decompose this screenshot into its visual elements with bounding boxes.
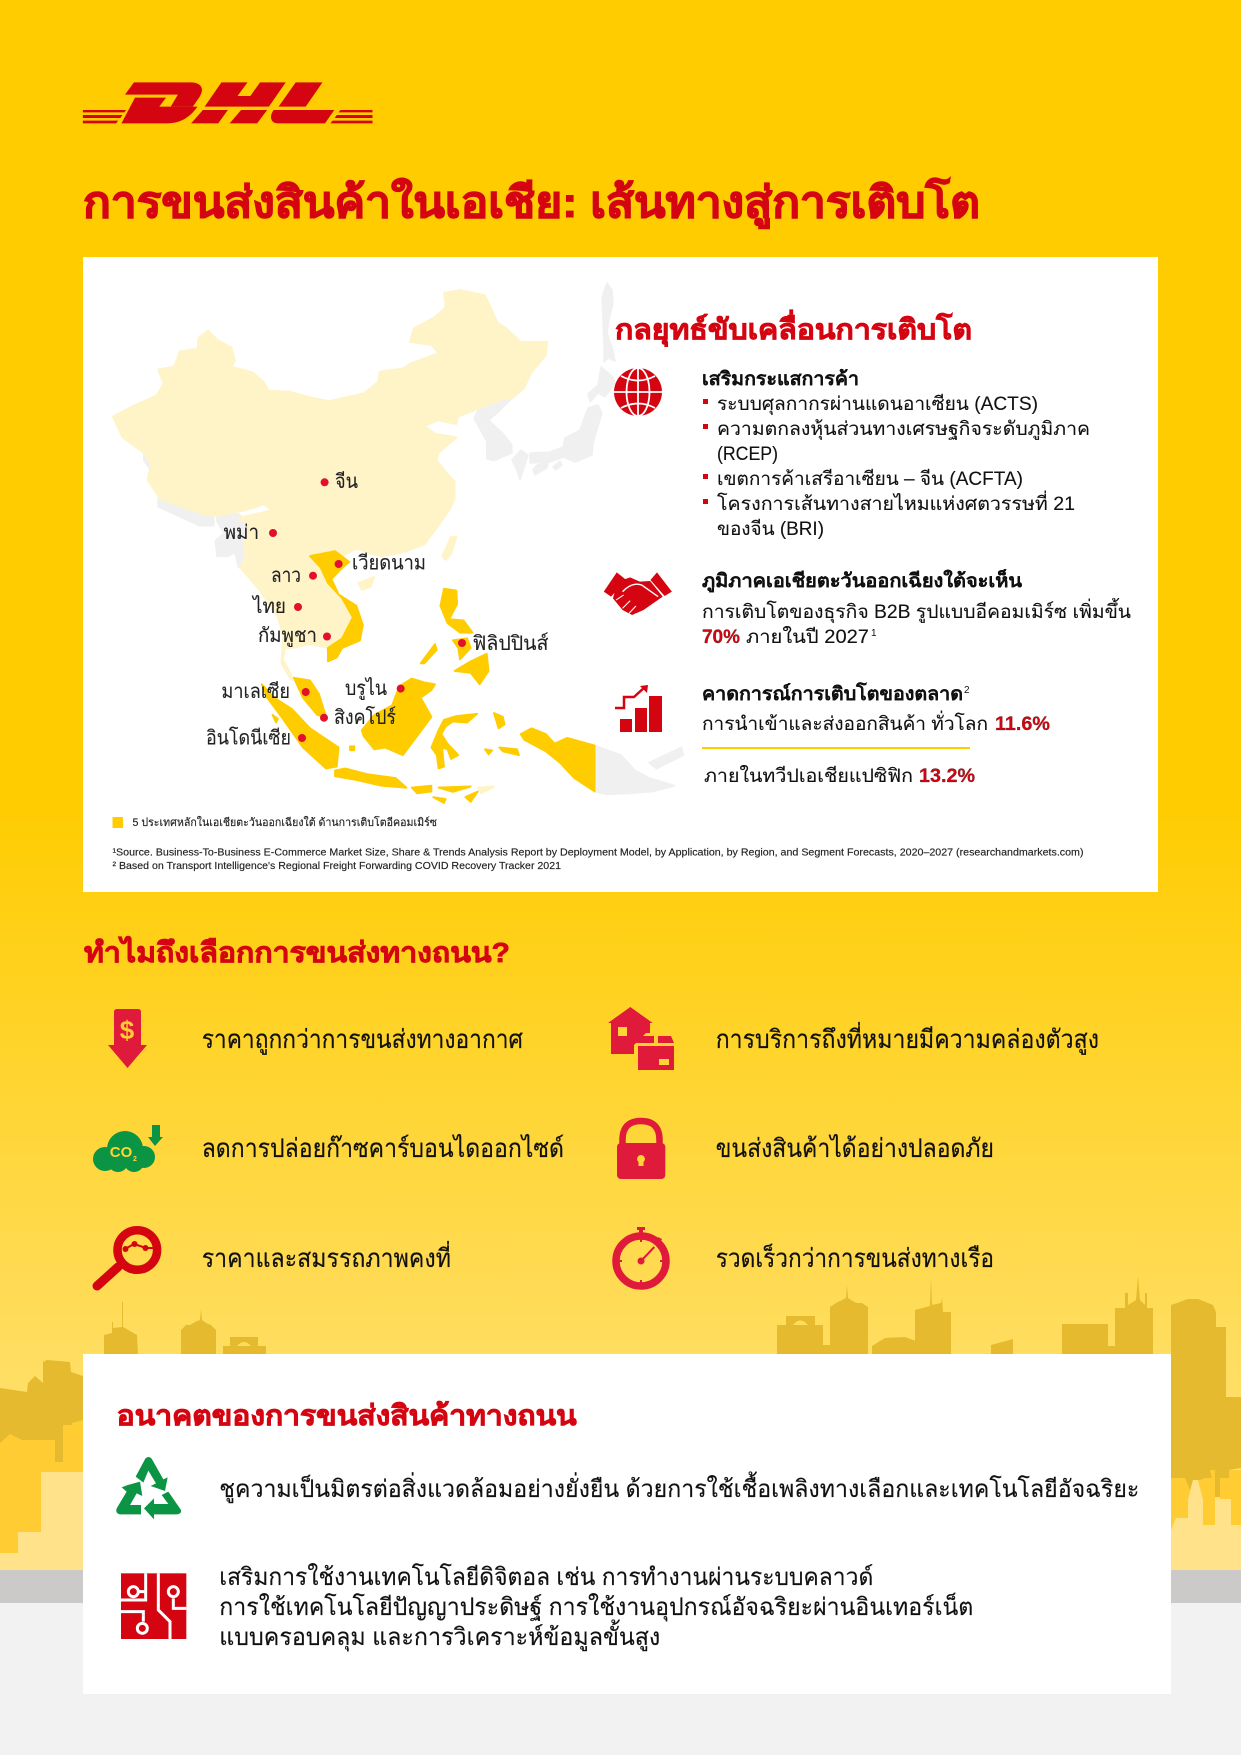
- footnotes: ² Based on Transport Intelligence's Regional Freight Forwarding COVID Recovery Tracker 2021: [112, 860, 561, 872]
- panel: future of road freight: [83, 1354, 1171, 1694]
- map labels: เวียดนาม: [352, 552, 426, 574]
- icon: padlock: [617, 1121, 665, 1179]
- title: การขนส่งสินค้าในเอเชีย: เส้นทางสู่การเติบโต: [83, 176, 980, 229]
- block: southeast asia: 70%: [702, 627, 740, 648]
- block: market growth forecast: 11.6%: [995, 714, 1050, 735]
- panel: growth strategy and map: [83, 257, 1158, 892]
- icon: growth chart: [615, 685, 662, 732]
- block: boost trade flows: ระบบศุลกากรผ่านแดนอาเซียน (ACTS): [717, 393, 1038, 416]
- icon: handshake: [604, 572, 672, 615]
- footnotes: [112, 847, 1084, 872]
- map labels: สิงคโปร์: [334, 706, 396, 729]
- text: cheaper than air: ราคาถูกกว่าการขนส่งทางอากาศ: [202, 1026, 523, 1055]
- map labels: บรูไน: [345, 677, 387, 701]
- icon: magnifier: [97, 1230, 157, 1286]
- text: digital technologies: เสริมการใช้งานเทคโนโลยีดิจิตอล เช่น การทำงานผ่านระบบคลาวด์: [219, 1563, 873, 1591]
- heading: future: อนาคตของการขนส่งสินค้าทางถนน: [117, 1400, 577, 1431]
- icon: price down arrow: $: [120, 1015, 135, 1045]
- block: boost trade flows: (RCEP): [717, 444, 778, 465]
- block: boost trade flows: โครงการเส้นทางสายไหมแห่งศตวรรษที่ 21: [717, 490, 1075, 515]
- text: last mile flexibility: การบริการถึงที่หมายมีความคล่องตัวสูง: [716, 1022, 1099, 1055]
- heading: why road freight: ทำไมถึงเลือกการขนส่งทางถนน?: [84, 936, 510, 968]
- map labels: กัมพูชา: [258, 625, 317, 648]
- block: southeast asia: ภูมิภาคเอเชียตะวันออกเฉียงใต้จะเห็น: [702, 568, 1022, 593]
- block: market growth forecast: 2: [964, 685, 970, 696]
- map labels: [206, 471, 548, 750]
- map labels: อินโดนีเซีย: [206, 726, 291, 750]
- icon: CO2 cloud: 2: [133, 1156, 137, 1163]
- block: southeast asia: 1: [871, 628, 877, 639]
- block: market growth forecast: 13.2%: [919, 766, 975, 787]
- text: stable price and capacity: ราคาและสมรรถภาพคงที่: [202, 1241, 451, 1273]
- map labels: มาเลเซีย: [221, 681, 290, 703]
- text: digital technologies: [219, 1563, 973, 1652]
- icon: globe: [614, 368, 662, 416]
- block: boost trade flows: เขตการค้าเสรีอาเซียน – จีน (ACFTA): [717, 468, 1023, 490]
- block: market growth forecast: ภายในทวีปเอเชียแปซิฟิก: [704, 765, 913, 787]
- block: southeast asia: การเติบโตของธุรกิจ B2B รูปแบบอีคอมเมิร์ซ เพิ่มขึ้น: [702, 598, 1131, 624]
- map labels: ไทย: [251, 595, 286, 618]
- icon: circuit: [121, 1573, 186, 1639]
- icon: price down arrow: [108, 1009, 147, 1068]
- map labels: ฟิลิปปินส์: [472, 632, 548, 655]
- map labels: จีน: [335, 471, 358, 493]
- block: market growth forecast: [702, 682, 1050, 787]
- icon: stopwatch: [616, 1227, 666, 1286]
- block: market growth forecast: คาดการณ์การเติบโตของตลาด: [702, 682, 963, 705]
- icon: CO2 cloud: CO: [110, 1144, 133, 1161]
- block: boost trade flows: [702, 368, 1090, 540]
- map of Asia: [113, 283, 683, 803]
- block: southeast asia: ภายในปี 2027: [746, 626, 869, 648]
- block: southeast asia: [702, 568, 1131, 648]
- block: market growth forecast: การนำเข้าและส่งออกสินค้า ทั่วโลก: [702, 710, 988, 735]
- text: digital technologies: การใช้เทคโนโลยีปัญญาประดิษฐ์ การใช้งานอุปกรณ์อัจฉริยะผ่านอินเทอร์เน็ต: [219, 1592, 973, 1622]
- text: faster than sea: รวดเร็วกว่าการขนส่งทางเรือ: [716, 1243, 994, 1273]
- text: secure transport: ขนส่งสินค้าได้อย่างปลอดภัย: [716, 1134, 994, 1163]
- text: digital technologies: แบบครอบคลุม และการวิเคราะห์ข้อมูลขั้นสูง: [219, 1619, 660, 1652]
- map labels: ลาว: [271, 565, 301, 587]
- text: lower CO2: ลดการปล่อยก๊าซคาร์บอนไดออกไซด์: [202, 1134, 564, 1163]
- footnotes: ¹Source. Business-To-Business E-Commerce Market Size, Share & Trends Analysis Report by Deployment Model, by Application, by Region, and Segment Forecasts, 2020–2027 (researchandmarkets.com): [112, 847, 1084, 859]
- city skyline: [0, 1276, 1241, 1570]
- legend: 5 ประเทศหลักในเอเชียตะวันออกเฉียงใต้ ด้านการเติบโตอีคอมเมิร์ซ: [132, 815, 438, 829]
- block: boost trade flows: เสริมกระแสการค้า: [702, 368, 859, 390]
- block: boost trade flows: ของจีน (BRI): [717, 518, 824, 540]
- map labels: พม่า: [224, 522, 259, 544]
- icon: warehouse and box: [608, 1007, 674, 1070]
- DHL logo: [83, 82, 372, 123]
- block: boost trade flows: ความตกลงหุ้นส่วนทางเศรษฐกิจระดับภูมิภาค: [717, 419, 1090, 441]
- map dots: [269, 478, 466, 742]
- text: sustainability: ชูความเป็นมิตรต่อสิ่งแวดล้อมอย่างยั่งยืน ด้วยการใช้เชื้อเพลิงทางเลือกและเทคโนโลยีอัจฉริยะ: [219, 1471, 1139, 1504]
- icon: CO2 cloud: [93, 1125, 163, 1172]
- icon: recycle: [116, 1457, 181, 1519]
- heading: growth strategies: กลยุทธ์ขับเคลื่อนการเติบโต: [615, 309, 972, 347]
